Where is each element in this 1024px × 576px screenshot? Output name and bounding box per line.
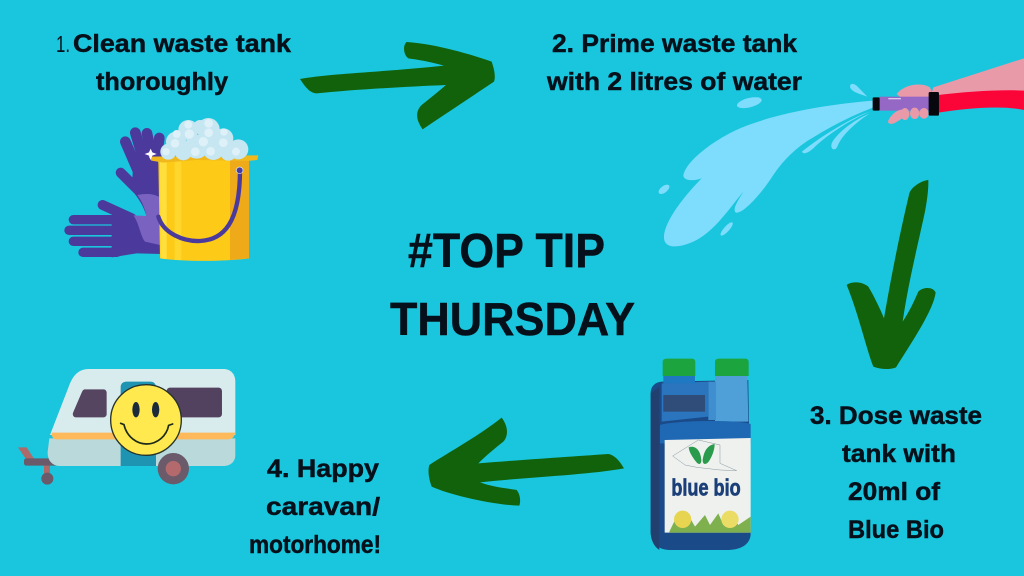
step 3 heading [810, 402, 982, 544]
step 3 heading: tank with [842, 440, 956, 468]
step 1 heading [56, 30, 291, 96]
caravan body [50, 369, 235, 435]
smiley face [111, 385, 181, 455]
wheel [158, 453, 189, 484]
soap foam [160, 118, 248, 161]
title [390, 225, 635, 345]
door [121, 382, 156, 466]
brand name: blue bio [671, 474, 741, 500]
arrow: step 1 to step 2 [300, 42, 495, 129]
arrow: step 3 to step 4 [429, 418, 624, 506]
icon: Blue Bio bottle [651, 359, 751, 550]
title: #TOP TIP [408, 225, 605, 278]
butterfly logo [689, 447, 701, 464]
nozzle [879, 97, 929, 111]
icon: gloves and soapy bucket [64, 118, 258, 261]
bucket [158, 160, 249, 261]
label map outline [673, 440, 737, 471]
green caps [663, 359, 695, 376]
back glove [121, 133, 159, 189]
step 4 heading: 4. Happy [267, 455, 379, 483]
arrow: step 2 to step 3 [847, 180, 936, 369]
step 3 heading: Blue Bio [848, 516, 944, 544]
tow hitch [18, 447, 34, 460]
step 4 heading: motorhome! [249, 531, 381, 559]
icon: caravan with smiley [18, 369, 235, 485]
step 1 heading: 1. [56, 31, 70, 57]
step 1 heading: thoroughly [96, 68, 228, 96]
label [665, 438, 751, 533]
bottle body [651, 380, 751, 550]
step 2 heading: 2. Prime waste tank [552, 30, 797, 58]
grass and flowers [669, 513, 751, 533]
step 2 heading: with 2 litres of water [546, 68, 802, 96]
front glove [64, 215, 162, 257]
arm [930, 58, 1024, 98]
step 1 heading: Clean waste tank [73, 30, 291, 58]
bucket handle [158, 170, 240, 241]
step 3 heading: 3. Dose waste [810, 402, 982, 430]
sparkle [145, 149, 157, 160]
water spray [657, 84, 873, 246]
icon: hose spraying water [657, 58, 1024, 246]
step 2 heading [546, 30, 802, 96]
hose [938, 90, 1024, 113]
step 3 heading: 20ml of [848, 478, 941, 506]
step 4 heading: caravan/ [266, 493, 380, 521]
title: THURSDAY [390, 293, 635, 345]
windows [73, 389, 107, 417]
fingers [888, 108, 929, 124]
step 4 heading [249, 455, 381, 559]
